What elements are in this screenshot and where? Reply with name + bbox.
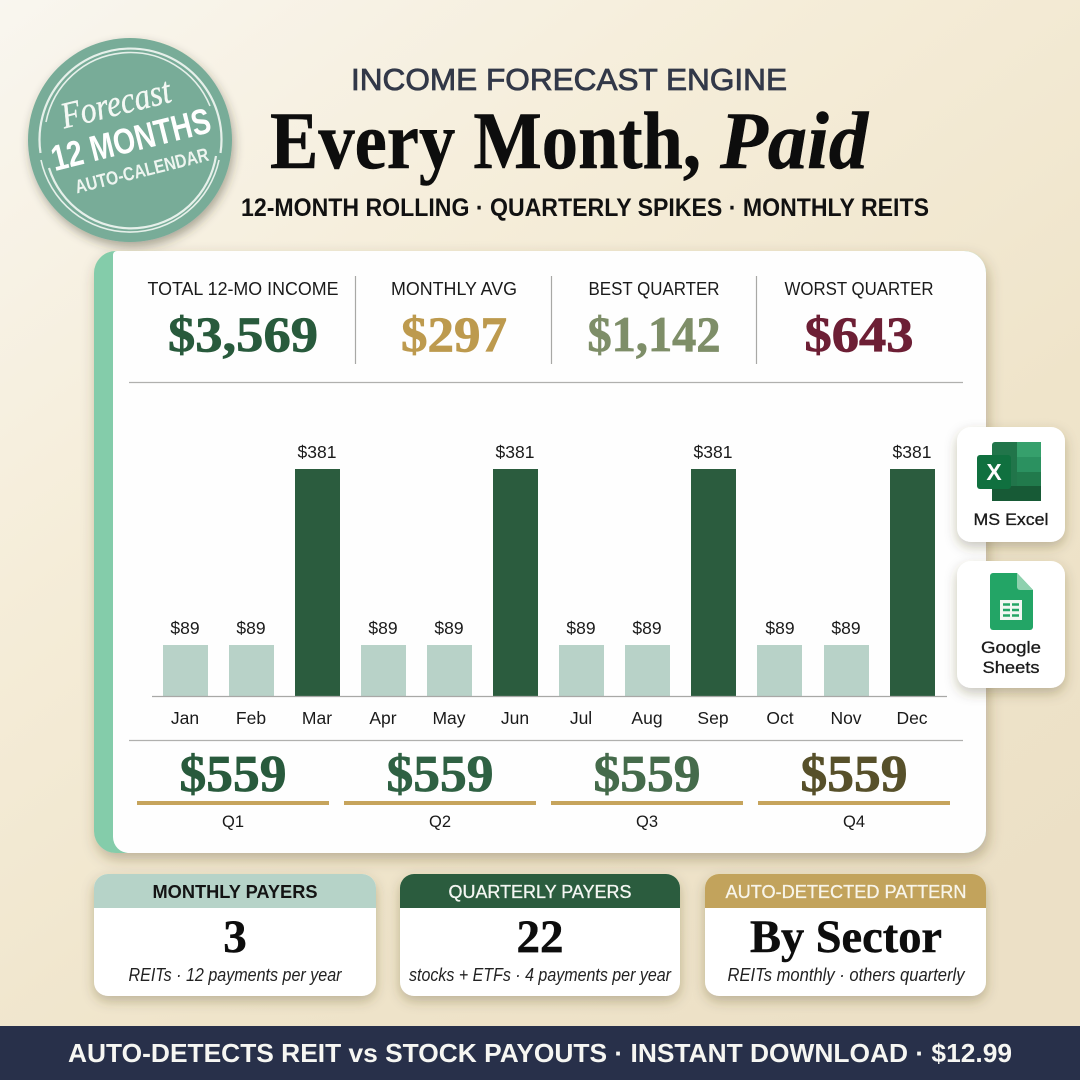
Q3 total: $559	[594, 746, 700, 803]
footer banner: AUTO-DETECTS REIT vs STOCK PAYOUTS · INSTANT DOWNLOAD · $12.99	[68, 1038, 1012, 1068]
icon: Excel: X	[986, 459, 1002, 485]
bar chart: $89	[434, 618, 464, 638]
KPI: worst quarter: $643	[804, 306, 914, 362]
app card: Google Sheets	[957, 561, 1065, 688]
KPI: best quarter: $1,142	[588, 306, 720, 362]
app card: MS Excel: MS Excel	[974, 511, 1048, 529]
Q4 total: $559	[800, 746, 908, 803]
bar chart: Feb	[236, 708, 266, 728]
panel: auto-detected pattern: By Sector	[750, 911, 942, 963]
badge: forecast 12 months: 12 MONTHS	[47, 100, 215, 179]
bar chart: $381	[893, 442, 931, 462]
quarterly totals	[137, 746, 950, 831]
badge: forecast 12 months	[28, 38, 232, 242]
Q4 total	[758, 746, 950, 831]
subtitle: 12-MONTH ROLLING · QUARTERLY SPIKES · MONTHLY REITS	[241, 194, 929, 222]
bar chart: $381	[694, 442, 732, 462]
eyebrow heading: INCOME FORECAST ENGINE	[351, 62, 787, 97]
Q2 total: $559	[386, 746, 494, 803]
KPI: best quarter	[588, 279, 720, 362]
bar chart: Mar	[302, 708, 332, 728]
bar chart: May	[432, 708, 466, 728]
KPI: monthly average	[391, 279, 517, 362]
title: Every Month,	[270, 95, 701, 186]
bar chart: Jul	[570, 708, 592, 728]
panel: monthly payers	[94, 874, 376, 996]
KPI: best quarter: BEST QUARTER	[588, 279, 720, 299]
badge: forecast 12 months: AUTO-CALENDAR	[73, 145, 211, 198]
KPI: monthly average: MONTHLY AVG	[391, 279, 517, 299]
panel: income dashboard	[94, 251, 986, 853]
panel: auto-detected pattern	[705, 874, 986, 996]
panel: monthly payers: REITs · 12 payments per year	[128, 965, 342, 985]
KPI: monthly average: $297	[401, 306, 507, 362]
bar chart: Jan	[171, 708, 199, 728]
bar chart: Oct	[766, 708, 794, 728]
panel: quarterly payers: QUARTERLY PAYERS	[448, 882, 632, 902]
KPI: total income: TOTAL 12-MO INCOME	[148, 279, 338, 299]
panel: quarterly payers	[400, 874, 680, 996]
Q2 total	[344, 746, 536, 831]
bar chart: Nov	[830, 708, 862, 728]
bar chart: Sep	[697, 708, 729, 728]
bar chart	[152, 442, 947, 728]
Q2 total: Q2	[429, 813, 451, 831]
Q1 total: Q1	[222, 813, 244, 831]
Q1 total: $559	[180, 746, 286, 803]
panel: auto-detected pattern: AUTO-DETECTED PATTERN	[726, 882, 966, 902]
bar chart: Aug	[631, 708, 663, 728]
app card: Google Sheets: Google	[981, 639, 1041, 657]
bar chart: $381	[298, 442, 336, 462]
panel: monthly payers: MONTHLY PAYERS	[152, 882, 318, 902]
KPI row	[148, 279, 934, 362]
panel: quarterly payers: stocks + ETFs · 4 payments per year	[409, 965, 672, 985]
KPI: total income: $3,569	[168, 306, 318, 362]
app card: MS Excel	[957, 427, 1065, 542]
bar chart: $89	[831, 618, 861, 638]
KPI: worst quarter: WORST QUARTER	[784, 279, 934, 299]
panel: auto-detected pattern: REITs monthly · others quarterly	[728, 965, 965, 985]
icon: Google Sheets	[990, 573, 1033, 630]
Q3 total	[551, 746, 743, 831]
bar chart: $89	[765, 618, 795, 638]
bar chart: Apr	[369, 708, 397, 728]
title: Paid	[719, 95, 869, 186]
panel: monthly payers: 3	[223, 911, 247, 963]
bar chart: $89	[368, 618, 398, 638]
badge: forecast 12 months: Forecast	[56, 70, 177, 138]
footer banner	[0, 1026, 1080, 1080]
Q4 total: Q4	[843, 813, 865, 831]
bar chart: Dec	[896, 708, 928, 728]
Q1 total	[137, 746, 329, 831]
app card: Google Sheets: Sheets	[982, 659, 1040, 677]
panel: quarterly payers: 22	[516, 911, 564, 963]
KPI: worst quarter	[784, 279, 934, 362]
Q3 total: Q3	[636, 813, 658, 831]
bar chart: $89	[236, 618, 266, 638]
bar chart: Jun	[501, 708, 529, 728]
bar chart: $89	[170, 618, 200, 638]
bar chart: $89	[566, 618, 596, 638]
bar chart: $89	[632, 618, 662, 638]
bar chart: $381	[496, 442, 534, 462]
KPI: total income	[148, 279, 338, 362]
